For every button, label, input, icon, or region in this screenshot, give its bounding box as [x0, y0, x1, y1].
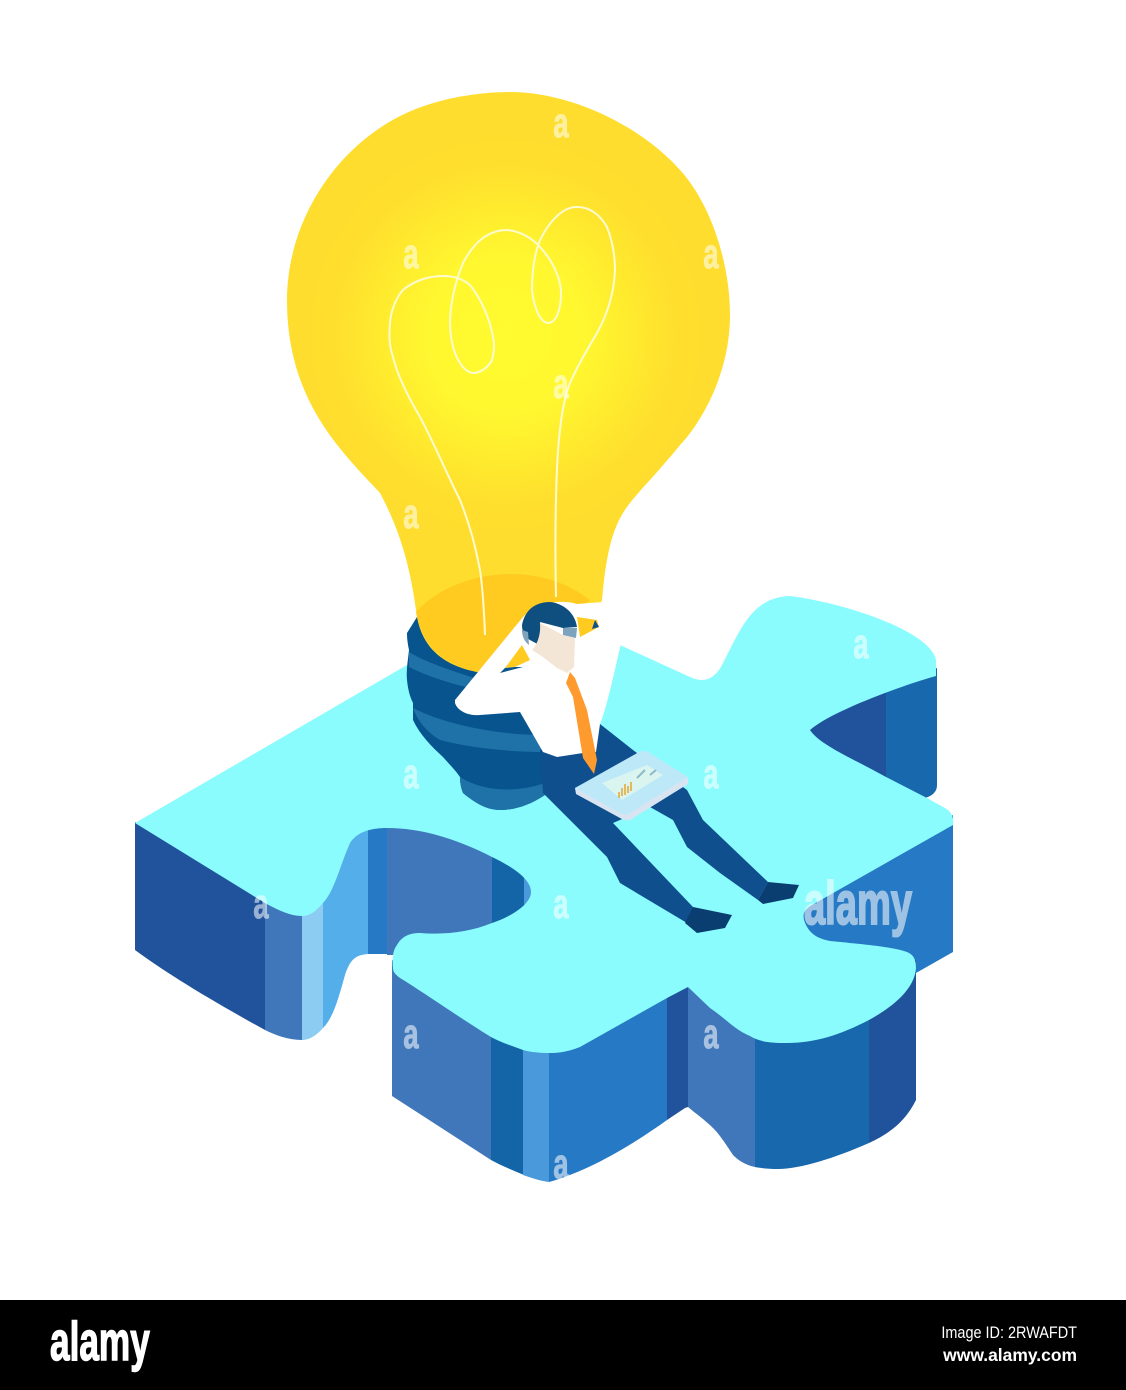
puzzle piece: top face [135, 596, 953, 1053]
upper right notch wall [806, 685, 886, 790]
watermark letters: a [553, 880, 569, 927]
right wall [798, 815, 953, 973]
left wall [135, 822, 265, 1030]
watermark letters: a [403, 750, 419, 797]
businessman [455, 602, 799, 933]
website: www.alamy.com [942, 1345, 1077, 1365]
watermark letters: a [553, 99, 569, 146]
watermark letters: a [553, 360, 569, 407]
watermark letters: a [703, 1010, 719, 1057]
hair [522, 602, 577, 647]
lower walls [392, 960, 491, 1160]
legs [540, 724, 768, 923]
watermark letters: a [553, 1140, 569, 1187]
watermark letters: a [703, 490, 719, 537]
watermark letters: a [403, 230, 419, 277]
filament [389, 207, 615, 635]
glass bulb [287, 92, 730, 675]
footer bar [0, 1300, 1126, 1390]
face [532, 623, 575, 673]
tie [566, 672, 597, 774]
watermark letters [253, 99, 869, 1187]
watermark letters: a [703, 750, 719, 797]
watermark letters: a [853, 620, 869, 667]
shoes [685, 882, 799, 933]
light bulb [287, 92, 730, 810]
shirt and arms [455, 602, 621, 757]
watermark letters: a [703, 230, 719, 277]
bulb screw base [407, 617, 545, 810]
gap behind left arm [505, 645, 530, 668]
tablet [575, 751, 688, 820]
hair highlights [522, 628, 577, 645]
footer logo: alamy [50, 1310, 150, 1372]
watermark letters: a [403, 1010, 419, 1057]
puzzle piece: side walls [135, 668, 953, 1182]
gap behind right arm [577, 617, 599, 637]
watermark letters: a [403, 490, 419, 537]
image id: Image ID: 2RWAFDT [941, 1324, 1077, 1342]
watermark logo: alamy [804, 870, 912, 937]
glass bulb lower shade [416, 574, 590, 675]
watermark letters: a [253, 880, 269, 927]
